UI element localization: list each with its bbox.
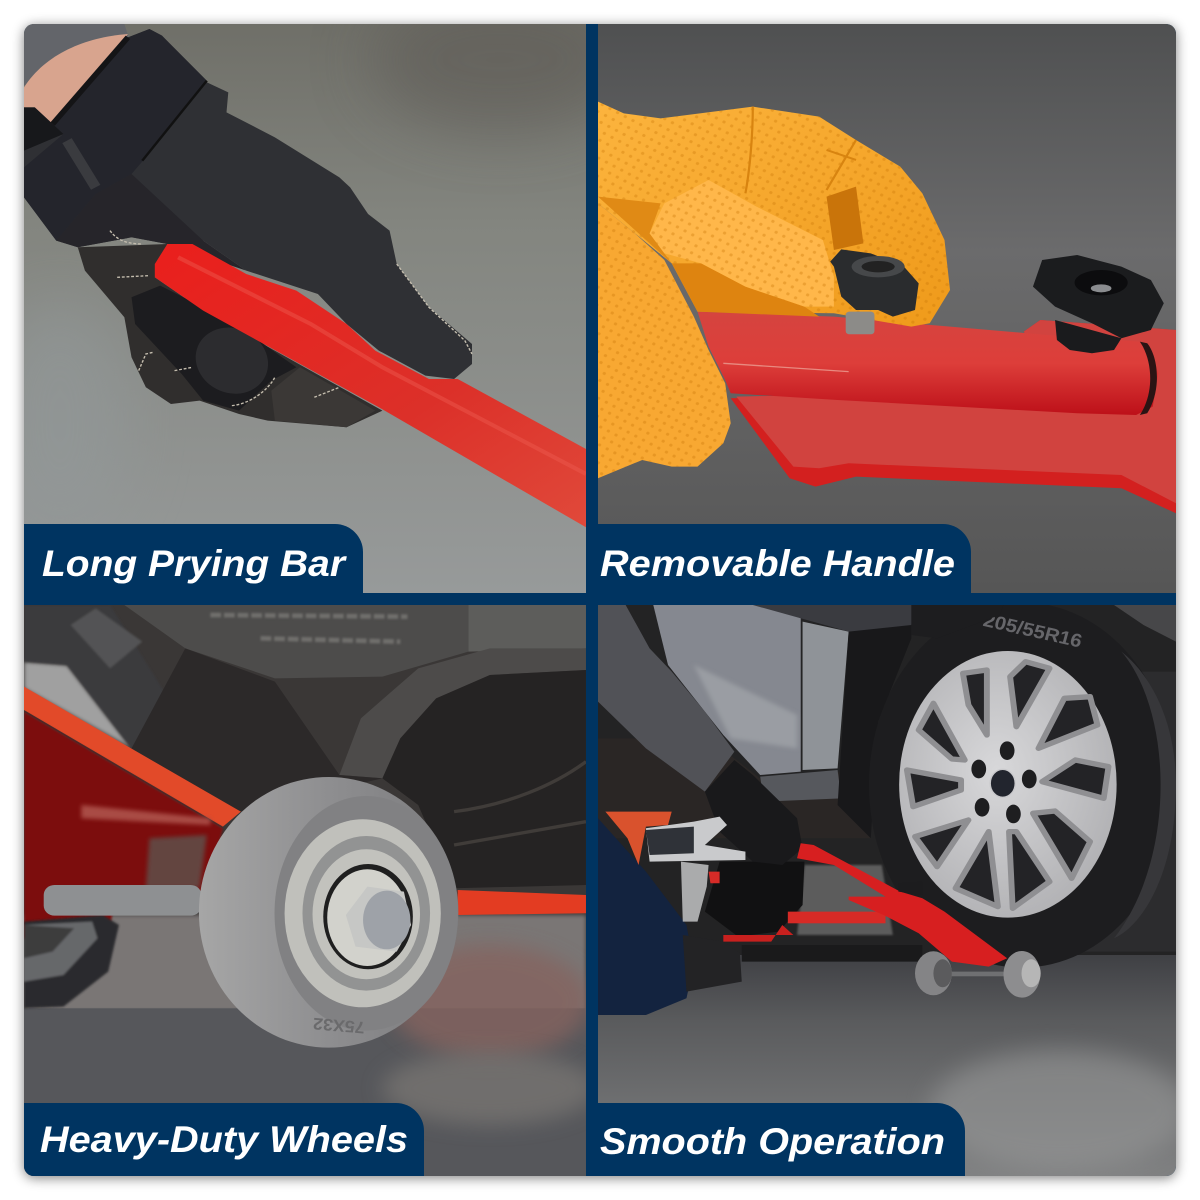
icon: jack small wheels xyxy=(915,951,1041,998)
icon: red handle tube xyxy=(698,312,1158,415)
icon: red jack frame xyxy=(24,687,586,938)
icon: blurred large tyre xyxy=(24,605,586,888)
icon: red prying bar xyxy=(155,244,586,527)
icon: sleeve and wrist xyxy=(24,24,130,124)
icon: mechanic arms xyxy=(598,605,1003,865)
tyre size marking: 205/55R16 xyxy=(981,610,1084,652)
icon: red flat plate xyxy=(731,320,1176,513)
icon: car tyre xyxy=(869,602,1176,968)
icon: impact wrench xyxy=(605,812,745,992)
label: heavy-duty wheels xyxy=(24,1103,424,1176)
icon: black glove back and cuff xyxy=(24,29,472,379)
icon: orange gloved hand xyxy=(598,102,950,478)
panel: long prying bar photo xyxy=(24,24,586,593)
floor xyxy=(24,915,597,1178)
label: smooth operation: Smooth Operation xyxy=(600,1121,945,1162)
icon: small blurred wheel xyxy=(24,915,119,1008)
label: long prying bar xyxy=(24,524,363,593)
wheel size marking: 75X32 xyxy=(312,1014,366,1037)
icon: large black knob xyxy=(1033,255,1164,353)
icon: car body xyxy=(598,605,1176,952)
label: removable handle: Removable Handle xyxy=(600,543,955,584)
panel: heavy-duty wheels photo xyxy=(24,605,597,1178)
icon: dark tyre behind jack xyxy=(705,862,804,937)
icon: small black knob xyxy=(830,249,919,334)
icon: red jack bar and frame xyxy=(723,843,1007,967)
icon: axle xyxy=(44,885,201,916)
label: heavy-duty wheels: Heavy-Duty Wheels xyxy=(40,1119,408,1160)
label: long prying bar: Long Prying Bar xyxy=(42,543,348,584)
icon: palm and thumb xyxy=(78,244,382,427)
icon: mechanic kneeling legs xyxy=(598,818,694,1015)
icon: alloy rim xyxy=(899,651,1117,918)
panel: smooth operation photo xyxy=(598,602,1190,1176)
glove stitching xyxy=(110,231,472,406)
label: smooth operation xyxy=(586,1103,965,1176)
panel: removable handle photo xyxy=(598,24,1176,593)
icon: rubber wheel xyxy=(199,777,458,1048)
label: removable handle xyxy=(586,524,971,593)
